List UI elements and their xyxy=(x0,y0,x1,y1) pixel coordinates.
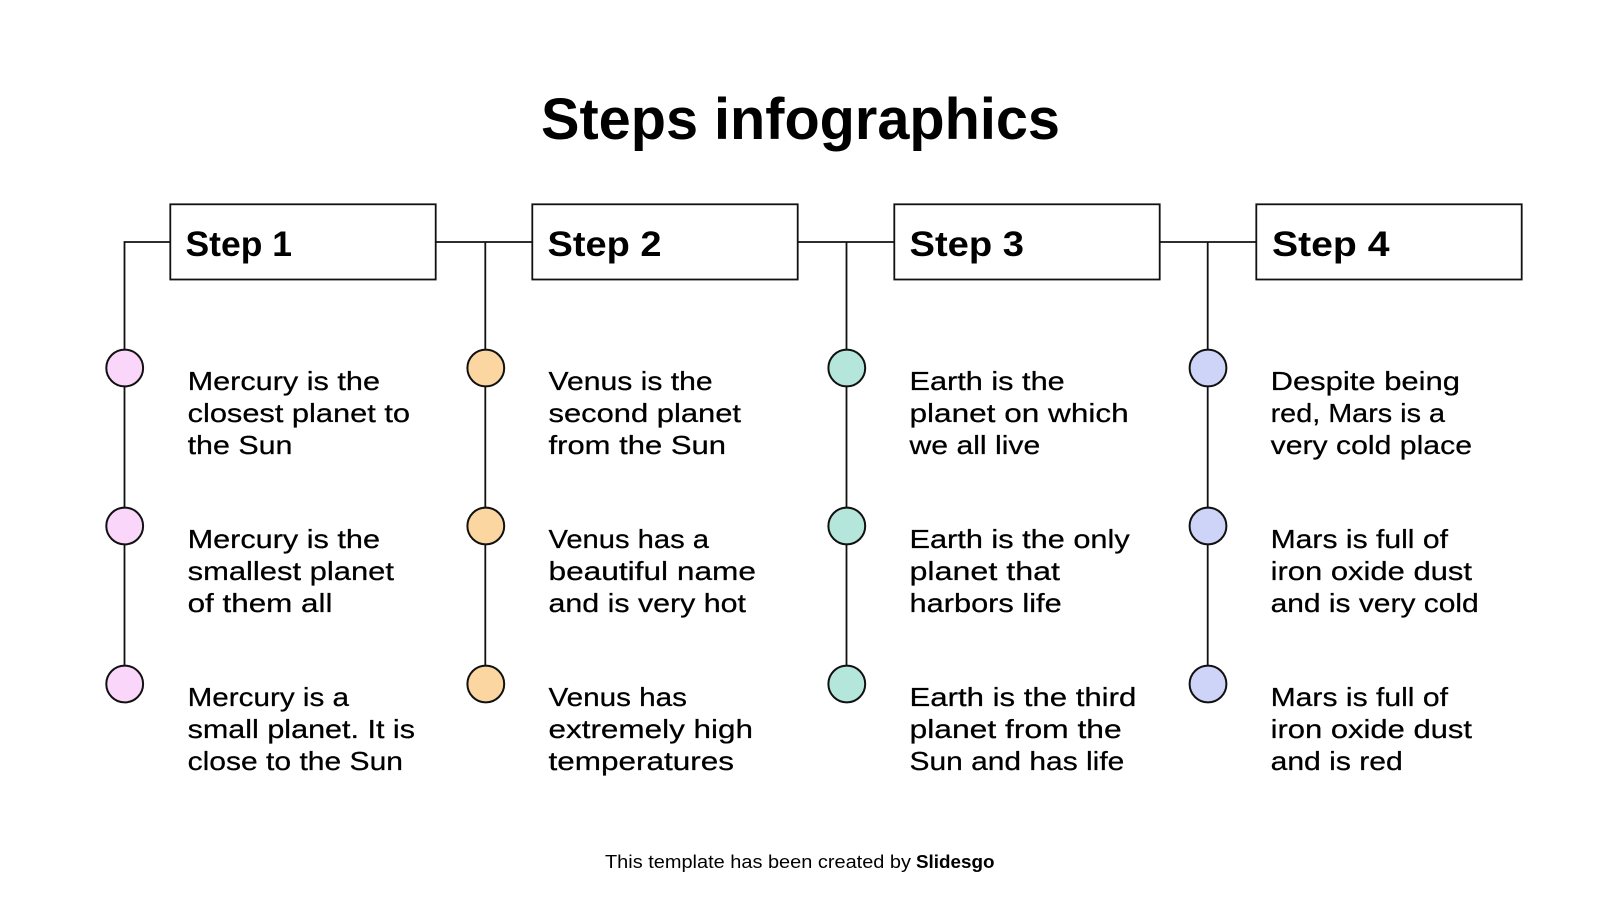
text: step 3 third: planet from the xyxy=(910,714,1122,744)
text: step 3 second: Earth is the only xyxy=(910,524,1130,554)
step 2 header box: Step 2 xyxy=(548,224,662,264)
marker: step 1 second xyxy=(106,508,143,544)
panel: step 3 xyxy=(828,204,1160,776)
text: step 2 second: Venus has a xyxy=(548,524,710,554)
text: step 4 second: Mars is full of xyxy=(1271,524,1449,554)
text: step 1 third xyxy=(188,682,415,776)
text: step 2 first xyxy=(548,366,742,460)
marker: step 3 first xyxy=(828,350,865,386)
text: step 3 second: harbors life xyxy=(910,588,1062,618)
panel: step 4 xyxy=(1190,204,1522,776)
text: step 3 third: Earth is the third xyxy=(910,682,1136,712)
step 4 header box xyxy=(1256,204,1522,280)
text: step 4 second: iron oxide dust xyxy=(1271,556,1473,586)
marker: step 3 third xyxy=(828,666,865,702)
text: step 4 second: and is very cold xyxy=(1271,588,1479,618)
text: step 3 first: planet on which xyxy=(910,398,1129,428)
text: step 2 third xyxy=(548,682,753,776)
text: step 3 first: we all live xyxy=(908,430,1040,460)
footer credit: Slidesgo xyxy=(916,851,994,872)
text: step 4 first: very cold place xyxy=(1271,430,1472,460)
text: step 2 first: Venus is the xyxy=(548,366,713,396)
text: step 1 first: closest planet to xyxy=(188,398,410,428)
marker: step 2 third xyxy=(467,666,504,702)
text: step 3 third xyxy=(910,682,1136,776)
marker: step 2 first xyxy=(467,350,504,386)
step 2 header box xyxy=(532,204,798,280)
text: step 4 third: Mars is full of xyxy=(1271,682,1449,712)
text: step 1 third: small planet. It is xyxy=(188,714,415,744)
text: step 4 first: red, Mars is a xyxy=(1271,398,1446,428)
text: step 3 second: planet that xyxy=(910,556,1061,586)
text: step 2 third: Venus has xyxy=(548,682,687,712)
text: step 1 first: the Sun xyxy=(188,430,292,460)
text: step 3 first xyxy=(908,366,1129,460)
text: step 2 first: second planet xyxy=(548,398,742,428)
text: step 1 third: Mercury is a xyxy=(188,682,350,712)
text: step 2 second xyxy=(548,524,756,618)
text: step 2 first: from the Sun xyxy=(548,430,726,460)
marker: step 4 third xyxy=(1190,666,1226,702)
text: step 1 second xyxy=(188,524,395,618)
step 1 header box: Step 1 xyxy=(186,224,292,264)
text: step 1 first xyxy=(188,366,410,460)
marker: step 2 second xyxy=(467,508,504,544)
text: step 4 second xyxy=(1271,524,1479,618)
text: step 1 second: of them all xyxy=(188,588,332,618)
text: step 3 third: Sun and has life xyxy=(910,746,1124,776)
text: step 2 second: and is very hot xyxy=(548,588,747,618)
marker: step 1 third xyxy=(106,666,143,702)
text: step 4 first: Despite being xyxy=(1271,366,1460,396)
text: step 4 third: iron oxide dust xyxy=(1271,714,1473,744)
text: step 3 second xyxy=(910,524,1130,618)
panel: step 1 xyxy=(106,204,436,776)
text: step 2 third: temperatures xyxy=(548,746,734,776)
step 3 header box: Step 3 xyxy=(910,224,1024,264)
marker: step 4 first xyxy=(1190,350,1226,386)
text: step 2 third: extremely high xyxy=(548,714,753,744)
text: step 1 second: smallest planet xyxy=(188,556,395,586)
title: Steps infographics xyxy=(541,87,1060,152)
marker: step 1 first xyxy=(106,350,143,386)
text: step 4 third: and is red xyxy=(1271,746,1403,776)
text: step 3 first: Earth is the xyxy=(910,366,1065,396)
step 1 header box xyxy=(170,204,436,280)
panel: step 2 xyxy=(467,204,798,776)
step 3 header box xyxy=(894,204,1160,280)
text: step 1 second: Mercury is the xyxy=(188,524,380,554)
text: step 2 second: beautiful name xyxy=(548,556,756,586)
marker: step 4 second xyxy=(1190,508,1226,544)
text: step 1 first: Mercury is the xyxy=(188,366,380,396)
step 4 header box: Step 4 xyxy=(1272,224,1390,264)
text: step 1 third: close to the Sun xyxy=(188,746,403,776)
text: step 4 third xyxy=(1271,682,1473,776)
connector: header line linking the steps xyxy=(124,242,1256,684)
text: step 4 first xyxy=(1271,366,1472,460)
marker: step 3 second xyxy=(828,508,865,544)
footer credit: This template has been created by xyxy=(605,851,912,872)
